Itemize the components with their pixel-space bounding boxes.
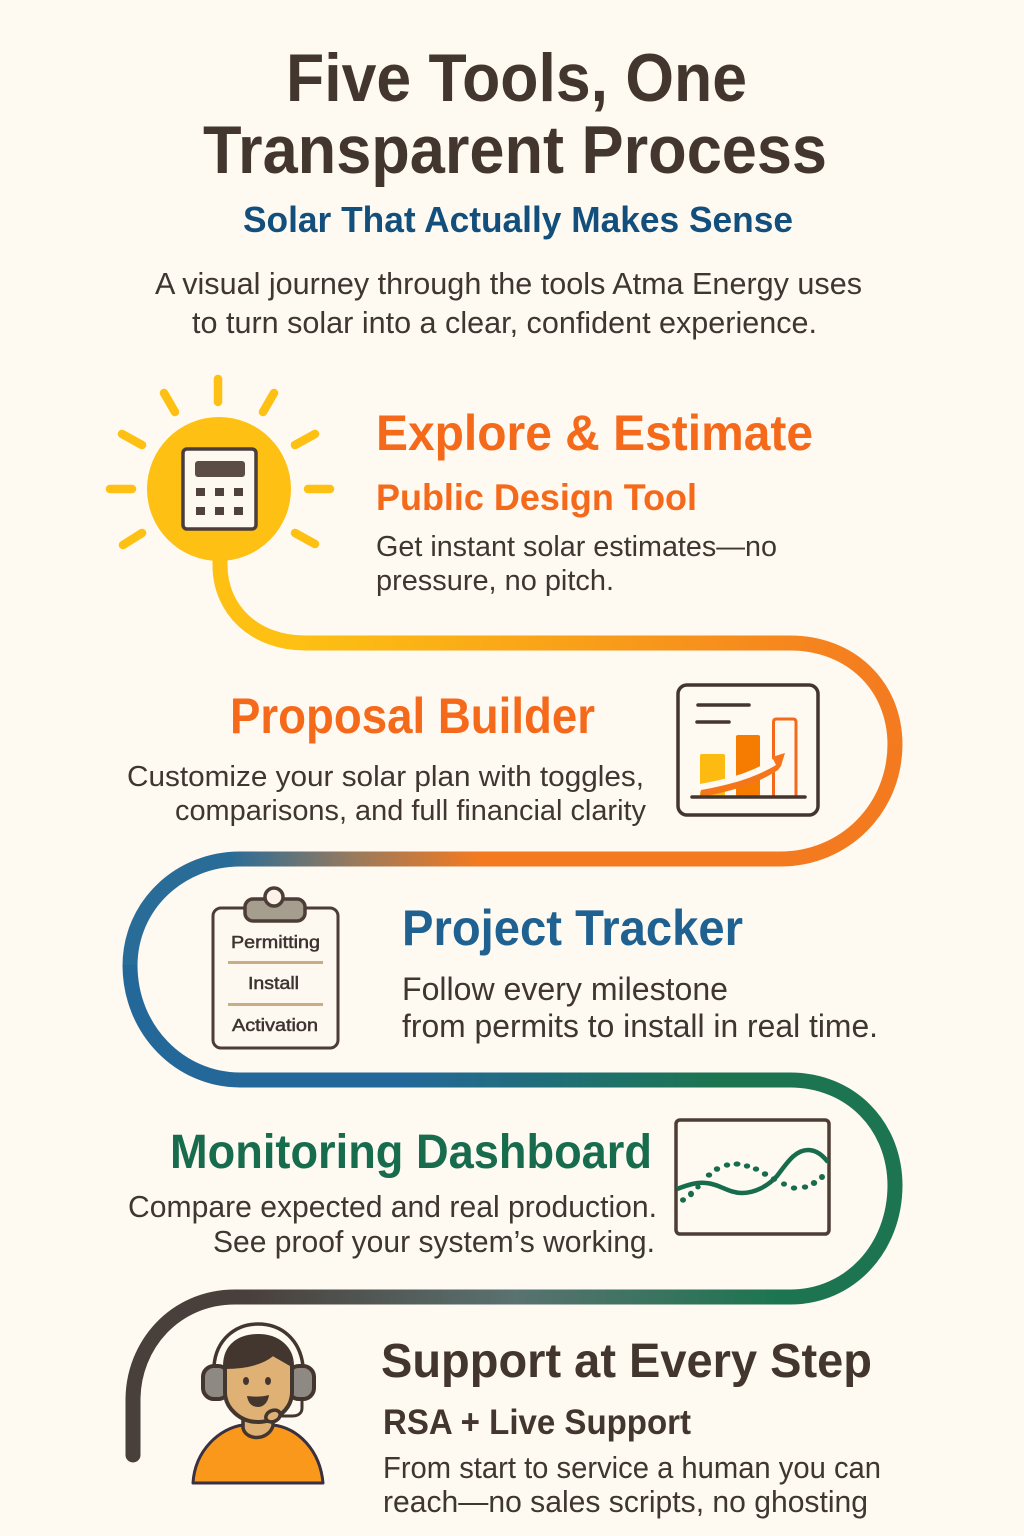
step 3: project tracker text: Project Tracker [402, 900, 743, 956]
step 3: project tracker text: from permits to install in real time. [402, 1008, 878, 1044]
step 5: support text: Support at Every Step [381, 1335, 872, 1388]
step 3: project tracker text [402, 900, 878, 1044]
step 4: monitoring dashboard text: Monitoring Dashboard [170, 1126, 652, 1179]
subtitle: Solar That Actually Makes Sense [243, 199, 793, 240]
step 4: monitoring dashboard text: Compare expected and real production. [128, 1189, 657, 1224]
icon: support agent with headset [193, 1324, 323, 1483]
step 2: proposal builder text [127, 688, 646, 827]
intro text: A visual journey through the tools Atma Energy uses [155, 266, 862, 301]
icon: monitoring line chart [676, 1120, 829, 1234]
step 1: explore and estimate text: Public Design Tool [376, 477, 697, 518]
icon: project tracker clipboard: Activation [232, 1015, 318, 1035]
step 1: explore and estimate text [376, 405, 813, 597]
icon: project tracker clipboard: Install [248, 973, 299, 993]
step 1: explore and estimate text: Get instant solar estimates—no [376, 531, 777, 563]
icon: sun with calculator [110, 379, 330, 561]
step 5: support text: From start to service a human you can [383, 1450, 881, 1485]
icon: project tracker clipboard: Permitting [231, 932, 320, 952]
step 3: project tracker text: Follow every milestone [402, 971, 728, 1007]
step 5: support text: reach—no sales scripts, no ghosting [383, 1484, 868, 1519]
title: Transparent Process [203, 112, 827, 188]
title: Five Tools, One [286, 40, 747, 116]
intro text: to turn solar into a clear, confident experience. [192, 305, 817, 340]
shoulders [193, 1425, 323, 1483]
step 2: proposal builder text: Proposal Builder [230, 688, 595, 744]
step 1: explore and estimate text: Explore & Estimate [376, 405, 813, 461]
winding journey path [130, 555, 895, 1455]
step 2: proposal builder text: comparisons, and full financial clarity [175, 795, 646, 827]
step 2: proposal builder text: Customize your solar plan with toggles, [127, 761, 644, 793]
step 5: support text: RSA + Live Support [383, 1403, 691, 1442]
intro text [155, 266, 862, 340]
step 1: explore and estimate text: pressure, no pitch. [376, 565, 614, 597]
icon: proposal bar chart [678, 685, 818, 815]
step 5: support text [381, 1335, 881, 1519]
icon: project tracker clipboard [213, 888, 338, 1048]
step 4: monitoring dashboard text [128, 1126, 657, 1259]
title [203, 40, 827, 188]
step 4: monitoring dashboard text: See proof your system’s working. [213, 1224, 655, 1259]
